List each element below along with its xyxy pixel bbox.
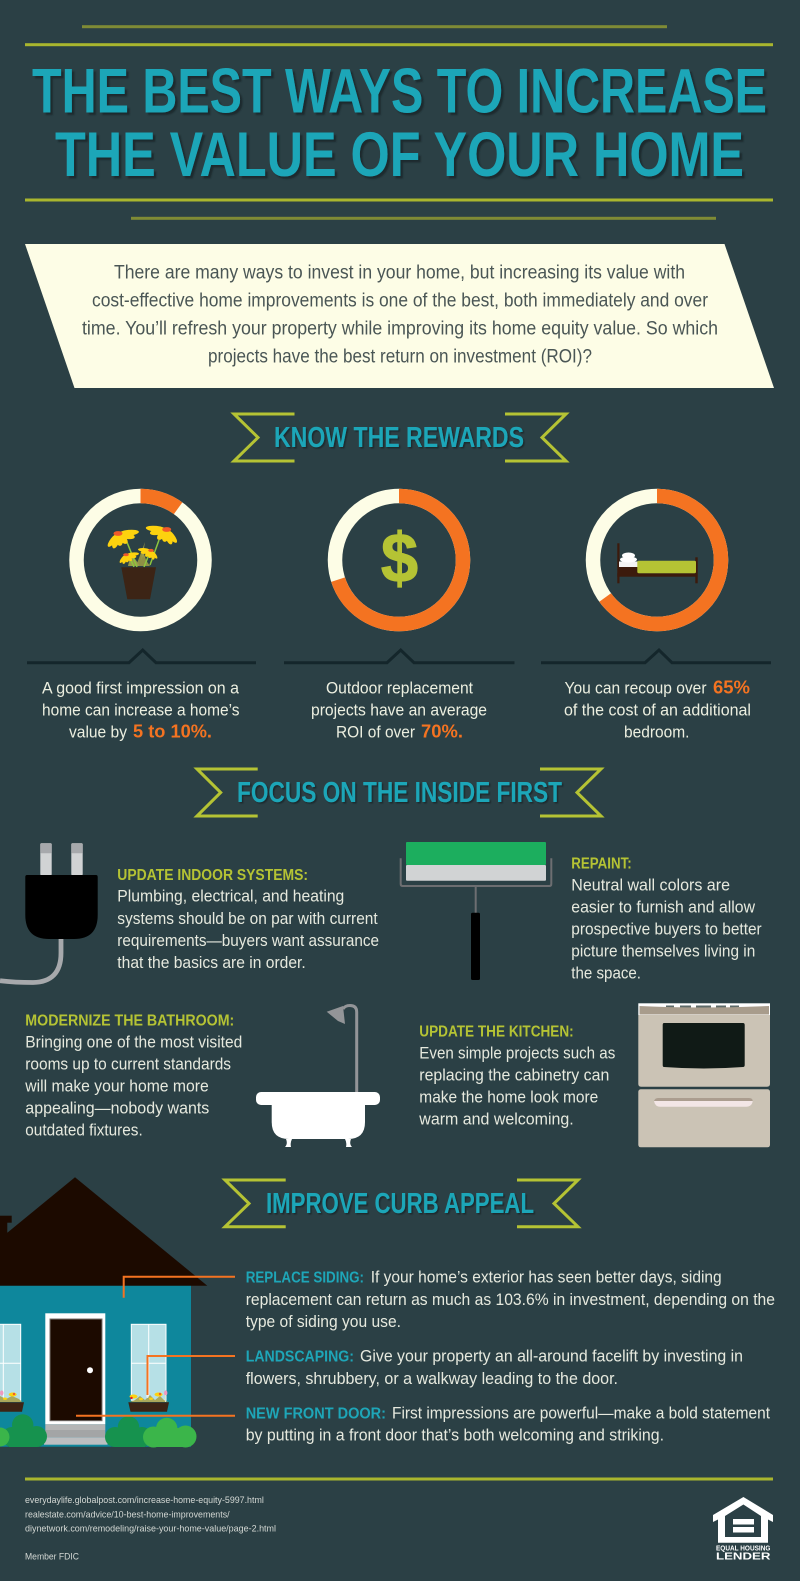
callout leader: siding xyxy=(124,1277,235,1298)
text block: modernize the bathroom: will make your home more xyxy=(24,1078,209,1096)
intro text xyxy=(82,263,718,368)
caption xyxy=(311,678,487,741)
sources: diynetwork.com/remodeling/raise-your-home-value/page-2.html xyxy=(25,1523,276,1534)
text block: update the kitchen: replacing the cabinetry can xyxy=(419,1067,609,1085)
text block: new front door xyxy=(246,1405,770,1445)
intro text: cost-effective home improvements is one of the best, both immediately and over xyxy=(92,291,709,312)
caption: A good first impression on a xyxy=(42,678,240,697)
chimney cap xyxy=(0,1216,12,1223)
house wall xyxy=(0,1285,191,1447)
caption: projects have an average xyxy=(311,700,487,719)
icon: stove xyxy=(638,1003,770,1147)
icon: paint roller xyxy=(401,842,551,980)
heading: improve curb appeal: IMPROVE CURB APPEAL xyxy=(266,1188,534,1220)
left flower box xyxy=(0,1390,24,1412)
donut chart: 65 percent xyxy=(593,496,721,624)
text block: update the kitchen: warm and welcoming. xyxy=(418,1111,574,1129)
text block: new front door: First impressions are powerful—make a bold statement xyxy=(392,1405,770,1423)
text block: landscaping xyxy=(246,1348,743,1388)
caption: 65% xyxy=(713,677,750,697)
text block: modernize the bathroom: MODERNIZE THE BATHROOM: xyxy=(25,1012,234,1029)
icon: dollar sign: $ xyxy=(381,519,418,597)
heading: know the rewards: KNOW THE REWARDS xyxy=(274,422,524,454)
text block: replace siding: replacement can return as much as 103.6% in investment, depending on the xyxy=(246,1291,775,1309)
divider xyxy=(27,650,256,663)
sources: Member FDIC xyxy=(25,1551,79,1562)
sources xyxy=(25,1495,276,1562)
text block: modernize the bathroom xyxy=(24,1012,242,1140)
caption: ROI of over xyxy=(336,722,415,741)
door xyxy=(44,1313,108,1445)
panel: outdoor replacement reward xyxy=(284,496,514,741)
text block: modernize the bathroom: rooms up to current standards xyxy=(25,1056,231,1074)
icon: flower pot xyxy=(106,525,179,599)
text block: new front door: by putting in a front door that’s both welcoming and striking. xyxy=(246,1427,664,1445)
text block: update the kitchen: UPDATE THE KITCHEN: xyxy=(419,1024,574,1041)
text block: landscaping: Give your property an all-around facelift by investing in xyxy=(360,1348,743,1366)
intro text: time. You’ll refresh your property while improving its home equity value. So which xyxy=(82,319,718,340)
caption xyxy=(42,678,240,741)
intro text: There are many ways to invest in your home, but increasing its value with xyxy=(114,263,685,284)
text block: replace siding: REPLACE SIDING: xyxy=(246,1270,364,1287)
text block: repaint: easier to furnish and allow xyxy=(571,899,755,917)
text block: update indoor systems: UPDATE INDOOR SYSTEMS: xyxy=(117,867,308,884)
text block: update indoor systems: that the basics are in order. xyxy=(117,954,306,972)
illustration: house xyxy=(0,1177,207,1448)
text block: update indoor systems xyxy=(117,867,379,972)
text block: update indoor systems: Plumbing, electrical, and heating xyxy=(117,888,344,906)
right flower box xyxy=(128,1390,169,1412)
text block: update indoor systems: systems should be on par with current xyxy=(117,910,378,928)
logo: equal housing lender: LENDER xyxy=(716,1550,771,1562)
text block: replace siding xyxy=(246,1269,775,1331)
logo: equal housing lender xyxy=(713,1497,773,1562)
caption: bedroom. xyxy=(624,722,690,741)
icon: bathtub xyxy=(256,1006,380,1147)
text block: repaint: REPAINT: xyxy=(571,856,632,873)
text block: modernize the bathroom: outdated fixtures. xyxy=(25,1122,143,1140)
text block: repaint xyxy=(571,856,762,983)
roof and chimney xyxy=(0,1177,207,1286)
caption: 70%. xyxy=(421,721,463,741)
caption: of the cost of an additional xyxy=(564,700,751,719)
heading: focus on the inside first xyxy=(197,769,601,816)
text block: modernize the bathroom: Bringing one of the most visited xyxy=(25,1033,242,1051)
text block: update indoor systems: requirements—buyers want assurance xyxy=(117,932,379,950)
left window xyxy=(0,1324,21,1400)
caption: Outdoor replacement xyxy=(326,678,473,697)
text block: modernize the bathroom: appealing—nobody wants xyxy=(25,1100,209,1118)
heading: improve curb appeal xyxy=(225,1180,578,1227)
right window xyxy=(131,1324,166,1400)
text block: update the kitchen xyxy=(418,1024,615,1129)
text block: repaint: Neutral wall colors are xyxy=(571,877,730,895)
title text xyxy=(32,56,767,190)
caption: home can increase a home’s xyxy=(42,700,240,719)
text block: repaint: the space. xyxy=(571,965,641,983)
text block: update the kitchen: make the home look more xyxy=(419,1089,598,1107)
title block xyxy=(25,25,773,220)
heading: know the rewards xyxy=(234,414,566,461)
sources: everydaylife.globalpost.com/increase-home-equity-5997.html xyxy=(25,1495,264,1506)
logo: equal housing lender: EQUAL HOUSING xyxy=(716,1544,771,1553)
heading: focus on the inside first: FOCUS ON THE INSIDE FIRST xyxy=(237,777,562,809)
text block: new front door: NEW FRONT DOOR: xyxy=(246,1406,386,1423)
text block: replace siding: If your home’s exterior has seen better days, siding xyxy=(371,1269,722,1287)
text block: replace siding: type of siding you use. xyxy=(246,1313,401,1331)
text block: landscaping: LANDSCAPING: xyxy=(246,1349,354,1366)
icon: bed xyxy=(617,543,698,583)
sources: realestate.com/advice/10-best-home-improvements/ xyxy=(25,1509,230,1520)
bushes xyxy=(0,1414,196,1448)
divider xyxy=(284,650,514,663)
donut chart: 70 percent xyxy=(335,496,463,624)
callout leader: front door xyxy=(76,1415,235,1417)
intro text: projects have the best return on investment (ROI)? xyxy=(208,347,592,368)
footer divider xyxy=(25,1478,773,1480)
icon: plug xyxy=(0,843,98,982)
caption: value by xyxy=(69,722,127,741)
caption: 5 to 10%. xyxy=(133,721,212,741)
donut chart: 10 percent xyxy=(76,496,204,624)
panel: bedroom reward xyxy=(541,496,771,741)
callout leader: landscaping xyxy=(148,1356,235,1395)
text block: landscaping: flowers, shrubbery, or a walkway leading to the door. xyxy=(246,1370,618,1388)
panel: first impression reward xyxy=(27,496,256,741)
text block: repaint: picture themselves living in xyxy=(571,943,755,961)
text block: repaint: prospective buyers to better xyxy=(571,921,762,939)
text block: update the kitchen: Even simple projects such as xyxy=(419,1045,615,1063)
caption: You can recoup over xyxy=(564,678,707,697)
caption xyxy=(564,677,751,741)
divider xyxy=(541,650,771,663)
panel: intro xyxy=(25,244,774,388)
